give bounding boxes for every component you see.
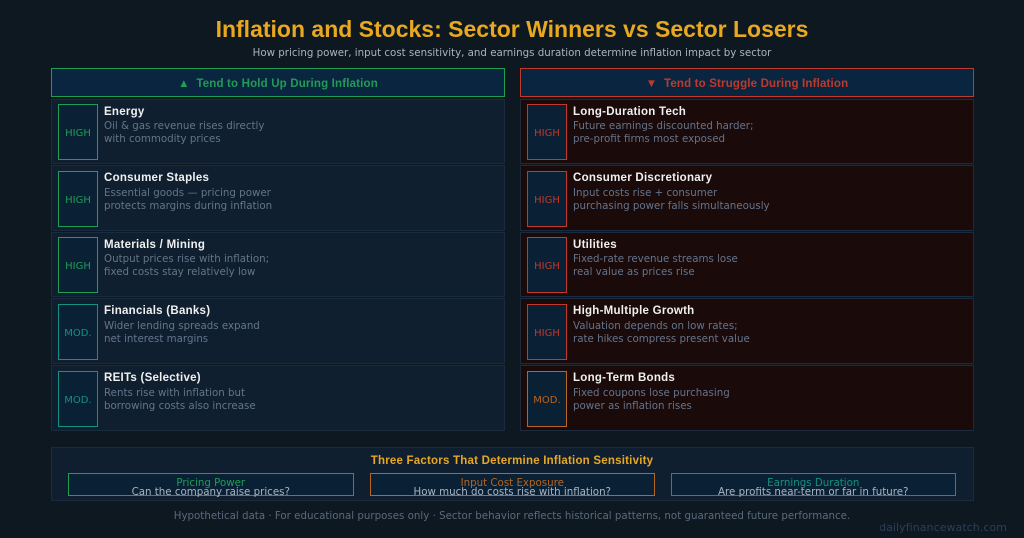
row: REITs (Selective): MOD.	[64, 394, 92, 406]
row: Consumer Discretionary: HIGH	[534, 194, 560, 206]
panel header: struggle: ▼ Tend to Struggle During Inflation	[646, 78, 848, 90]
row: REITs (Selective): Rents rise with inflation but borrowing costs also increase	[104, 386, 256, 412]
row: Energy: Energy	[104, 106, 145, 118]
row: Materials / Mining	[51, 232, 505, 297]
row: Energy: HIGH	[65, 128, 91, 139]
factor label: input cost exposure: Input Cost Exposure	[461, 476, 564, 488]
row: High-Multiple Growth: Valuation depends on low rates; rate hikes compress present value	[573, 320, 750, 344]
row: Consumer Discretionary	[520, 165, 974, 230]
row: Energy: Oil & gas revenue rises directly with commodity prices	[104, 120, 264, 145]
footer note: Hypothetical data · For educational purposes only · Sector behavior reflects historical patterns, not guaranteed future performance.	[174, 510, 850, 522]
row: Energy	[51, 98, 505, 164]
row: Financials (Banks): Financials (Banks)	[104, 305, 210, 317]
factor text: input cost exposure: How much do costs rise with inflation?	[413, 486, 611, 498]
row: Consumer Staples: Consumer Staples	[104, 172, 209, 184]
row: Utilities: Fixed-rate revenue streams lose real value as prices rise	[573, 253, 738, 278]
row: Materials / Mining: Materials / Mining	[104, 238, 205, 250]
factor: input cost exposure	[370, 473, 655, 496]
row: Materials / Mining: HIGH	[65, 261, 91, 272]
watermark: dailyfinancewatch.com	[879, 521, 1007, 534]
subtitle: How pricing power, input cost sensitivity, and earnings duration determine inflation impact by sector	[253, 47, 771, 59]
factor: earnings duration	[670, 473, 956, 496]
panel: three factors	[51, 447, 974, 501]
row: Utilities	[520, 232, 974, 297]
row: Utilities: Utilities	[573, 238, 617, 250]
row: Consumer Discretionary: Consumer Discretionary	[573, 172, 712, 184]
row: Long-Term Bonds: Fixed coupons lose purchasing power as inflation rises	[573, 386, 730, 412]
panel header: hold up	[51, 68, 505, 96]
factor text: pricing power: Can the company raise prices?	[132, 486, 290, 498]
row: High-Multiple Growth	[520, 298, 974, 364]
row: Consumer Staples: HIGH	[65, 194, 91, 206]
factor label: earnings duration: Earnings Duration	[767, 476, 859, 488]
row: High-Multiple Growth: HIGH	[534, 328, 560, 338]
panel header: struggle	[520, 68, 974, 96]
row: Consumer Staples: Essential goods — pricing power protects margins during inflation	[104, 186, 272, 212]
row: Long-Term Bonds: MOD.	[533, 394, 561, 406]
row: Materials / Mining: Output prices rise with inflation; fixed costs stay relatively low	[104, 253, 269, 278]
row: Consumer Discretionary: Input costs rise + consumer purchasing power falls simultaneously	[573, 186, 770, 212]
row: Long-Term Bonds: Long-Term Bonds	[573, 372, 675, 384]
panel header: hold up: ▲ Tend to Hold Up During Inflation	[178, 78, 378, 90]
row: Financials (Banks)	[51, 298, 505, 364]
row: REITs (Selective): REITs (Selective)	[104, 372, 201, 384]
row: Consumer Staples	[51, 165, 505, 230]
title: Inflation and Stocks: Sector Winners vs Sector Losers	[216, 16, 808, 42]
row: High-Multiple Growth: High-Multiple Growth	[573, 305, 694, 317]
factor text: earnings duration: Are profits near-term or far in future?	[718, 486, 908, 498]
row: Financials (Banks): Wider lending spreads expand net interest margins	[104, 320, 260, 344]
row: REITs (Selective)	[51, 365, 505, 430]
factor: pricing power	[68, 473, 354, 496]
heading: three factors: Three Factors That Determine Inflation Sensitivity	[371, 454, 653, 466]
row: Long-Duration Tech: HIGH	[534, 128, 560, 139]
row: Long-Duration Tech	[520, 98, 974, 164]
row: Long-Duration Tech: Future earnings discounted harder; pre-profit firms most exposed	[573, 120, 753, 145]
row: Utilities: HIGH	[534, 261, 560, 272]
row: Long-Duration Tech: Long-Duration Tech	[573, 106, 686, 118]
row: Long-Term Bonds	[520, 365, 974, 430]
row: Financials (Banks): MOD.	[64, 328, 92, 338]
factor label: pricing power: Pricing Power	[176, 476, 245, 488]
